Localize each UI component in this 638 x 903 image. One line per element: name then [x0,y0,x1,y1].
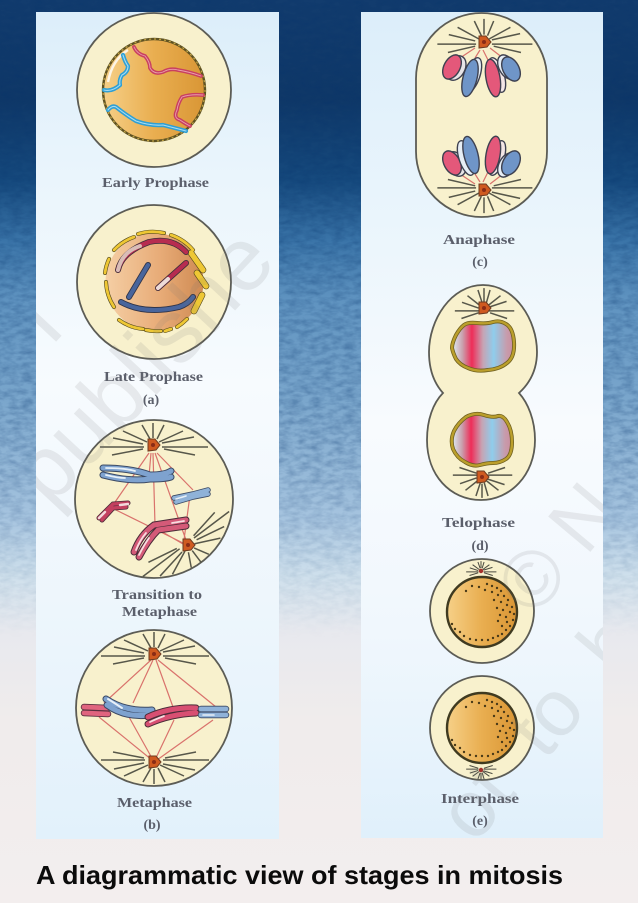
chromosomes: upper group [439,52,524,98]
chromatin: pink strands [134,47,203,126]
label: (e): (e) [472,814,488,829]
nucleus: lower [452,414,512,466]
spindle fibres [113,453,193,544]
asters and centrosomes [437,19,532,213]
cell: anaphase [416,13,547,217]
asters and centrosomes [101,632,209,784]
label: Transition to Metaphase [112,588,202,620]
title: A diagrammatic view of stages in mitosis [36,860,563,890]
label: Late Prophase: Late Prophase [104,370,203,385]
asters and centrosomes [100,423,244,596]
label: (b): (b) [143,818,161,833]
panel: left column of mitosis stages [36,12,279,839]
label: Anaphase: Anaphase [443,233,515,248]
textured blue gradient background [0,0,638,666]
label: Metaphase: Metaphase [117,796,192,811]
cell: early prophase [77,13,231,167]
panel: right column of mitosis stages [361,12,603,838]
chromosome: large pink [134,520,186,557]
label: Transition to Metaphase: Transition to [112,588,202,603]
label: Early Prophase: Early Prophase [102,176,209,191]
chromosomes: lower group [439,135,524,180]
watermark: right panel [452,482,603,836]
cell: interphase upper [430,559,534,663]
chromosome: small blue [174,490,208,502]
fragmented nuclear envelope [105,232,206,331]
watermark: left panel [36,242,270,517]
chromosomes: blue [121,265,193,310]
label: (d): (d) [471,539,489,554]
spindle fibres [460,48,503,184]
chromosome: large blue [103,468,171,480]
asters and centrosomes [453,288,514,498]
label: (a): (a) [143,393,159,408]
watermark: right panel: © N [479,466,636,630]
watermark: left panel: publishe [0,209,293,523]
spindle fibres [99,660,216,760]
label: (c): (c) [472,255,488,270]
cell: transition to metaphase [75,420,244,596]
cell: telophase [427,285,537,500]
cell: interphase lower [430,676,534,780]
chromatin: blue strands [104,55,186,131]
nucleus: upper [452,321,514,371]
label: Interphase: Interphase [441,792,519,807]
chromosomes on metaphase plate [84,699,226,724]
cell: late prophase [77,205,231,359]
cell: metaphase [76,630,232,786]
chromosome: small pink [99,503,128,520]
label: Telophase: Telophase [442,516,515,531]
label: Transition to Metaphase: Metaphase [122,605,197,620]
chromosomes: pink [118,241,186,288]
